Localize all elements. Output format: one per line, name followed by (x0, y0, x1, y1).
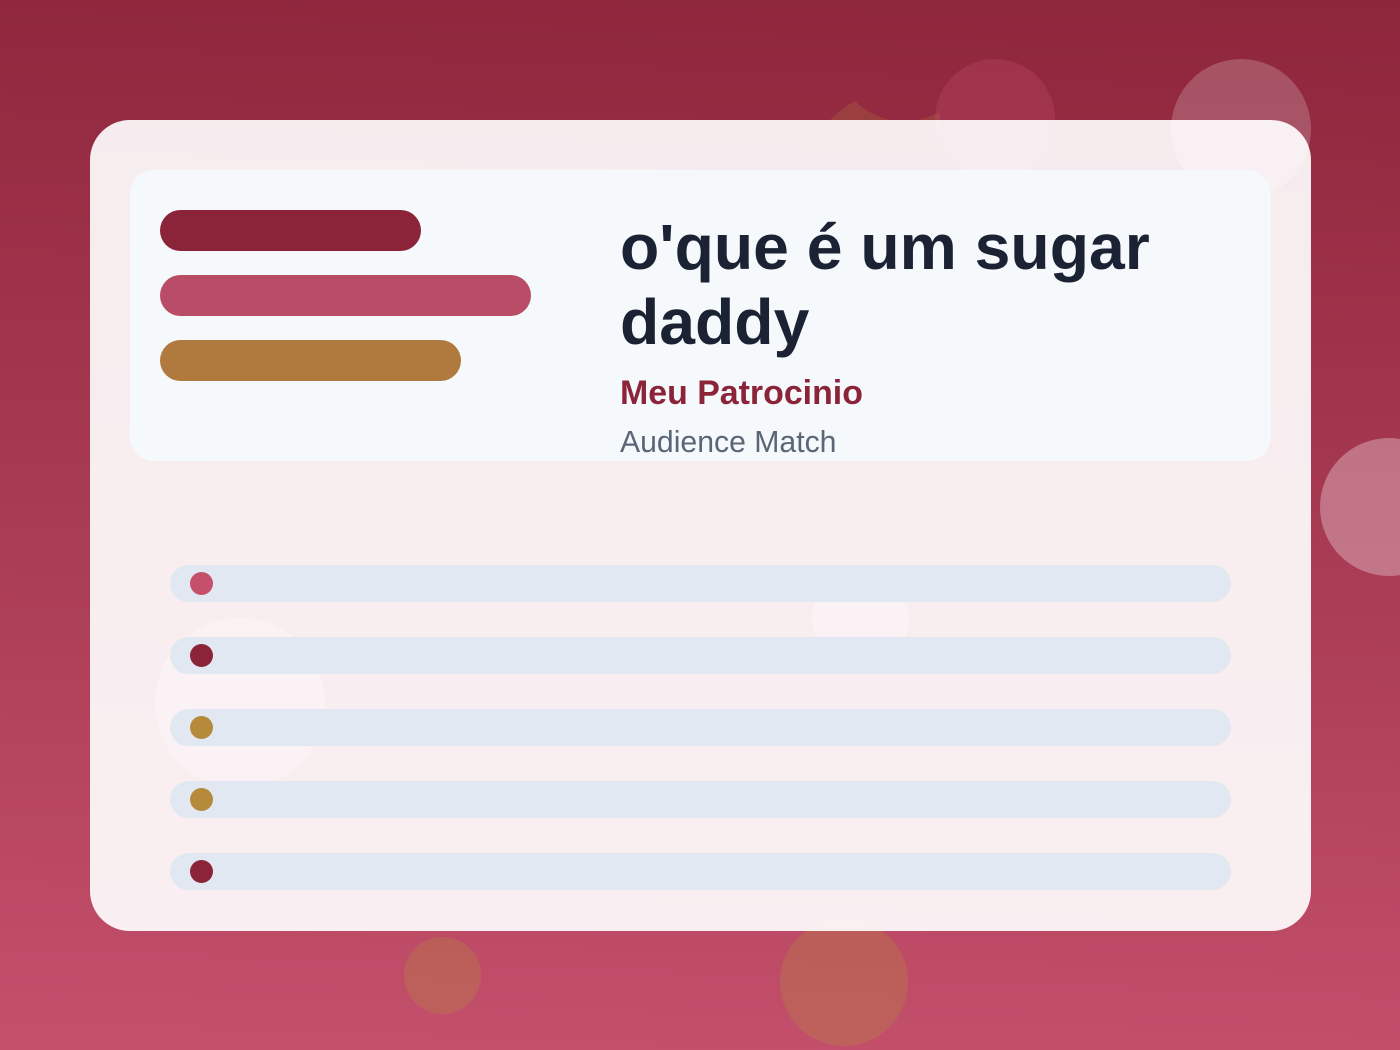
decorative circle: bottom large gold (780, 918, 908, 1046)
list row 5 (170, 853, 1231, 890)
dot: gold (190, 716, 213, 739)
decorative circle: faint centre (812, 569, 909, 666)
subtitle: audience match: Audience Match (620, 426, 836, 459)
dot: rose (190, 572, 213, 595)
header panel (130, 170, 1271, 461)
dot: crimson (190, 860, 213, 883)
decorative circle: right edge (1320, 438, 1400, 576)
list row 3 (170, 709, 1231, 746)
list row 2 (170, 637, 1231, 674)
bar: crimson (160, 210, 421, 251)
bar: gold (160, 340, 461, 381)
decorative circle: bottom small gold (404, 937, 481, 1014)
decorative circle: top right (1171, 59, 1311, 199)
list row 1 (170, 565, 1231, 602)
title: o'que é um sugar (620, 211, 1150, 283)
bar: rose (160, 275, 531, 316)
dot: crimson (190, 644, 213, 667)
list row 4 (170, 781, 1231, 818)
main card (90, 120, 1311, 931)
decorative circle: top rose (935, 59, 1055, 179)
dot: gold (190, 788, 213, 811)
decorative shape: gold sliver behind card (830, 101, 940, 120)
title: daddy (620, 286, 809, 358)
subtitle: brand: Meu Patrocinio (620, 374, 863, 412)
title (620, 211, 1150, 358)
decorative circle: faint left (155, 618, 325, 788)
